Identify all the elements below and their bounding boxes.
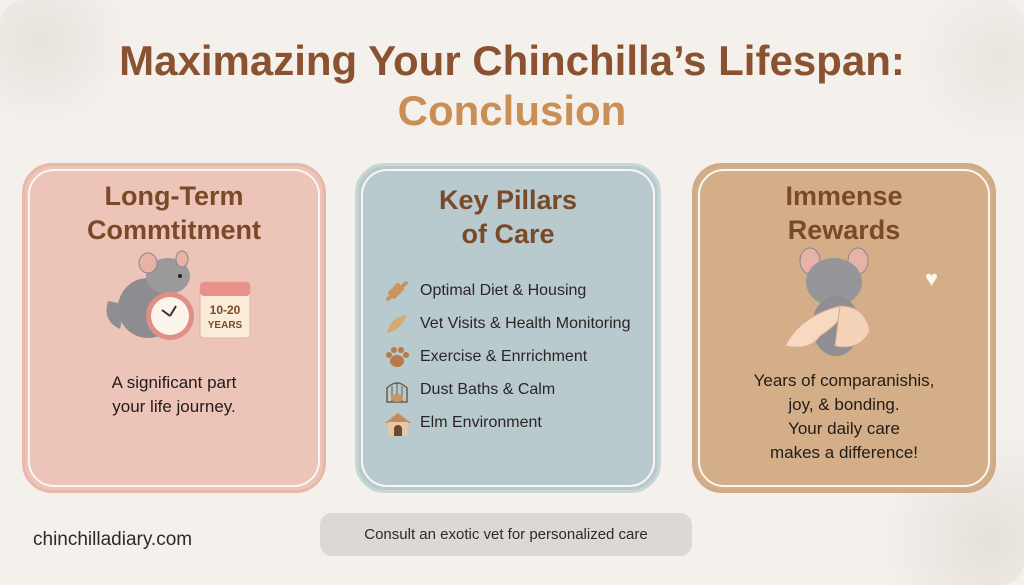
icon: chinchilla with clock and calendar: YEARS: [208, 320, 243, 331]
text: makes a difference!: [770, 443, 918, 462]
text: your life journey.: [112, 397, 236, 416]
footer: vet note pill: Consult an exotic vet for personalized care: [364, 526, 648, 543]
footer: website: chinchilladiary.com: [33, 529, 192, 550]
text: Years of comparanishis,: [754, 371, 934, 390]
heading: [87, 181, 261, 245]
title: Conclusion: [398, 87, 626, 134]
heading: [785, 181, 903, 245]
text: [112, 373, 236, 416]
list item 2: [387, 315, 630, 333]
panel: key pillars: Vet Visits & Health Monitoring: [420, 315, 630, 332]
text: [754, 371, 934, 462]
list item 4: [386, 381, 555, 403]
list item 5: [385, 413, 542, 436]
text: Your daily care: [788, 419, 900, 438]
title: [119, 37, 905, 134]
title: Maximazing Your Chinchilla’s Lifespan:: [119, 37, 905, 84]
panel: key pillars: Exercise & Enrrichment: [420, 348, 587, 365]
heading: Immense: [785, 181, 903, 211]
heading: Rewards: [788, 215, 900, 245]
heading: Commtitment: [87, 215, 261, 245]
panel: key pillars: Dust Baths & Calm: [420, 381, 555, 398]
panel: key pillars: Optimal Diet & Housing: [420, 282, 586, 299]
list item 3: [386, 347, 588, 367]
icon: chinchilla with clock and calendar: [106, 250, 250, 340]
panel: key pillars: [355, 163, 661, 493]
text: A significant part: [112, 373, 236, 392]
list item 1: [386, 280, 586, 302]
heading: of Care: [461, 219, 555, 249]
footer: vet note pill: [320, 513, 692, 556]
panel: immense rewards: [692, 163, 996, 493]
text: joy, & bonding.: [788, 395, 900, 414]
icon: chinchilla with clock and calendar: 10-20: [210, 303, 241, 317]
heading: Long-Term: [104, 181, 243, 211]
panel: key pillars: Elm Environment: [420, 414, 542, 431]
icon: chinchilla in hands: [786, 248, 870, 356]
icon: heart: ♥: [925, 266, 938, 291]
heading: Key Pillars: [439, 185, 577, 215]
panel: long-term commitment: [22, 163, 326, 493]
heading: [439, 185, 577, 249]
